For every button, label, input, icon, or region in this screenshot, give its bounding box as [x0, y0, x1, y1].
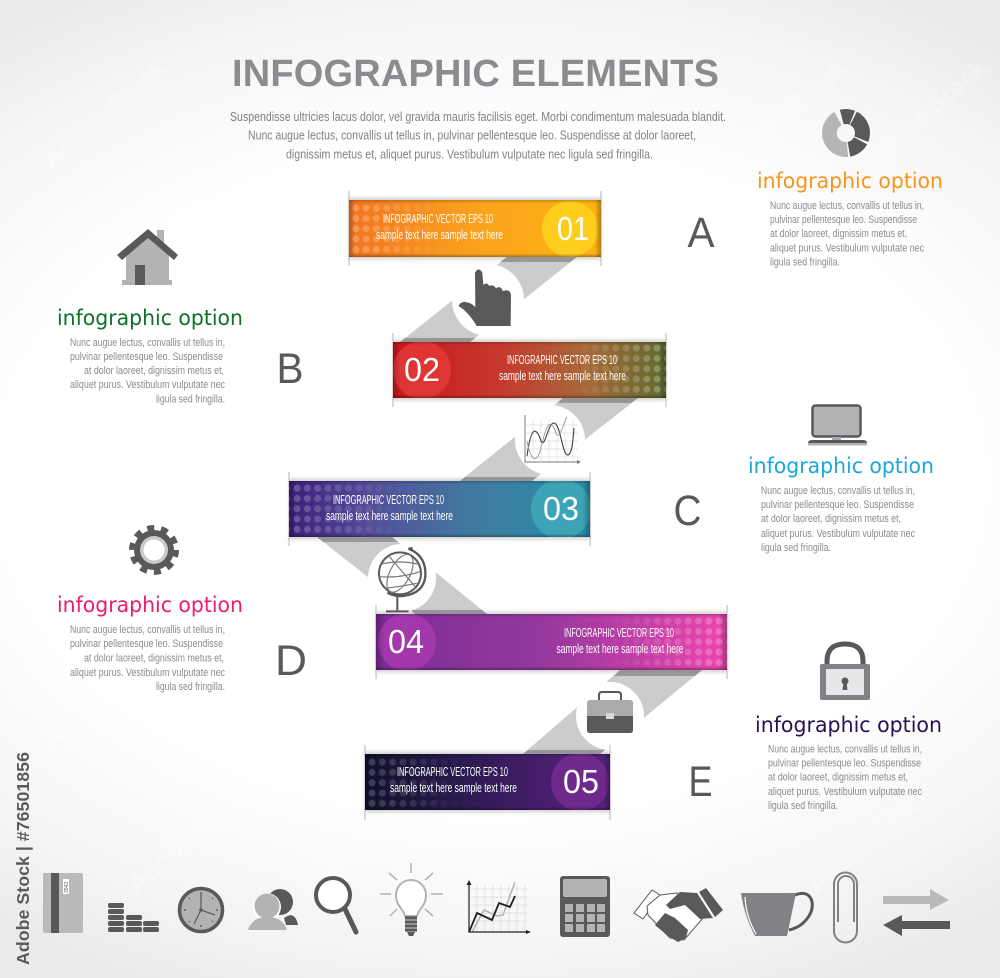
watermark pattern: Adobe Stock [122, 779, 257, 899]
banner 02: sample text here sample text here [499, 369, 626, 383]
panel: option C: infographic option [748, 454, 934, 478]
panel: option D: ligula sed fringilla. [156, 681, 225, 693]
connector: 02 to 03 [460, 398, 638, 481]
watermark pattern: Adobe Stock [377, 634, 512, 754]
banner 01: INFOGRAPHIC VECTOR EPS 10 [383, 212, 493, 226]
banner 05: 05 [563, 763, 599, 800]
watermark pattern: Adobe Stock [802, 199, 937, 319]
watermark pattern: Adobe Stock [717, 634, 852, 754]
letter A: A [688, 209, 715, 257]
panel: option E: ligula sed fringilla. [768, 800, 838, 812]
panel: option B: at dolor laoreet, dignissim metus et, [84, 365, 224, 377]
icon: stacked bars [108, 903, 159, 932]
icon: pointing hand [458, 269, 511, 326]
icon: paperclip [834, 872, 857, 942]
icon: line chart [525, 415, 581, 464]
panel: option D: at dolor laoreet, dignissim metus et, [84, 652, 224, 664]
banner 04: INFOGRAPHIC VECTOR EPS 10 [564, 626, 674, 640]
stock credit: Adobe Stock | #76501856 [13, 752, 33, 965]
panel: option E: infographic option [755, 713, 942, 737]
panel: option E [755, 644, 942, 812]
banner 01 [349, 191, 601, 266]
panel: option D: infographic option [57, 593, 243, 617]
letter D: D [275, 637, 307, 685]
banner 04 [376, 605, 727, 679]
icon: exchange arrows [883, 889, 950, 936]
watermark pattern: Adobe Stock [632, 489, 767, 609]
banner 03 [289, 472, 591, 546]
watermark pattern: Adobe Stock [802, 779, 937, 899]
watermark pattern: Adobe Stock [632, 779, 767, 899]
panel: option B: ligula sed fringilla. [156, 394, 225, 406]
watermark pattern: Adobe Stock [462, 199, 597, 319]
connector: 01 to 02 [400, 257, 577, 342]
intro text [230, 109, 726, 162]
banner 04: sample text here sample text here [556, 642, 684, 656]
icon: globe [379, 548, 425, 611]
watermark pattern: Adobe Stock [462, 779, 597, 899]
panel: option C: pulvinar pellentesque leo. Suspendisse [761, 499, 914, 511]
icon: people [248, 889, 298, 930]
intro text: Suspendisse ultricies lacus dolor, vel gravida mauris facilisis eget. Morbi condimentum malesuada blandit. [230, 109, 726, 124]
icon: coffee cup [741, 893, 812, 936]
icon: house [117, 229, 178, 285]
watermark pattern: Adobe Stock [632, 199, 767, 319]
title: INFOGRAPHIC ELEMENTS [232, 53, 719, 95]
watermark pattern: Adobe Stock [122, 489, 257, 609]
icon: credit card [43, 873, 83, 933]
banner 03: sample text here sample text here [326, 509, 453, 523]
banner 02 [393, 333, 666, 407]
panel: option A [757, 109, 943, 269]
panel: option E: aliquet purus. Vestibulum vulputate nec [768, 786, 922, 798]
watermark pattern: Adobe Stock [377, 54, 512, 174]
panel: option C: Nunc augue lectus, convallis ut tellus in, [761, 485, 915, 497]
icon: calculator [560, 876, 610, 937]
watermark pattern: Adobe Stock [37, 54, 172, 174]
panel: option D: aliquet purus. Vestibulum vulputate nec [70, 667, 225, 679]
icon: donut chart [822, 109, 870, 157]
icon: laptop [808, 406, 867, 446]
panel: option C [748, 406, 934, 554]
panel: option A: pulvinar pellentesque leo. Suspendisse [770, 214, 917, 226]
intro text: Nunc augue lectus, convallis ut tellus in, pulvinar pellentesque leo. Suspendisse at dolor laoreet, [248, 128, 696, 142]
watermark pattern: Adobe Stock [547, 344, 682, 464]
watermark pattern: Adobe Stock [292, 199, 427, 319]
panel: option B: aliquet purus. Vestibulum vulputate nec [70, 379, 225, 391]
panel: option A: infographic option [757, 169, 943, 193]
watermark pattern: Adobe Stock [547, 634, 682, 754]
panel: option A: ligula sed fringilla. [770, 256, 840, 268]
connector: 03 to 04 [317, 537, 487, 614]
panel: option E: Nunc augue lectus, convallis ut tellus in, [768, 744, 922, 756]
icon: credit card: 3543 [64, 882, 70, 893]
watermark pattern: Adobe Stock [37, 634, 172, 754]
watermark pattern: Adobe Stock [207, 634, 342, 754]
banner 05: INFOGRAPHIC VECTOR EPS 10 [397, 765, 508, 779]
panel: option B: infographic option [57, 306, 243, 330]
panel: option A: at dolor laoreet, dignissim metus et, [770, 228, 907, 240]
watermark pattern: Adobe Stock [207, 54, 342, 174]
letter C: C [674, 487, 702, 535]
panel: option D: pulvinar pellentesque leo. Suspendisse [70, 638, 223, 650]
panel: option B: Nunc augue lectus, convallis ut tellus in, [70, 337, 225, 349]
watermark pattern: Adobe Stock [857, 344, 992, 464]
watermark pattern: Adobe Stock [857, 54, 992, 174]
banner 02: 02 [404, 351, 440, 388]
watermark pattern: Adobe Stock [802, 489, 937, 609]
icon: light bulb [380, 863, 443, 936]
icon: briefcase [587, 692, 633, 733]
icon row [43, 863, 950, 942]
watermark pattern: Adobe Stock [717, 54, 852, 174]
banner 03: 03 [543, 490, 579, 527]
panel: option C: ligula sed fringilla. [761, 542, 831, 554]
icon: handshake [634, 888, 723, 942]
watermark pattern: Adobe Stock [207, 344, 342, 464]
panel: option D: Nunc augue lectus, convallis ut tellus in, [70, 624, 225, 636]
icon: magnifier [316, 878, 356, 932]
panel: option E: at dolor laoreet, dignissim metus et, [768, 772, 908, 784]
panel: option E: pulvinar pellentesque leo. Suspendisse [768, 758, 921, 770]
icon: clock [180, 888, 222, 932]
watermark pattern: Adobe Stock [377, 344, 512, 464]
panel: option D [57, 528, 243, 693]
intro text: dignissim metus et, aliquet purus. Vestibulum vulputate nec ligula sed fringilla. [286, 146, 653, 162]
letter B: B [276, 345, 304, 393]
watermark pattern: Adobe Stock [292, 779, 427, 899]
banner 05 [365, 745, 610, 820]
watermark pattern: Adobe Stock [462, 489, 597, 609]
panel: option B [57, 229, 243, 406]
watermark pattern: Adobe Stock [857, 634, 992, 754]
watermark pattern: Adobe Stock [122, 199, 257, 319]
watermark pattern: Adobe Stock [717, 344, 852, 464]
watermark pattern: Adobe Stock [547, 54, 682, 174]
panel: option B: pulvinar pellentesque leo. Suspendisse [70, 351, 223, 363]
banner 01: 01 [557, 210, 589, 247]
connector: 04 to 05 [523, 670, 702, 754]
banner 02: INFOGRAPHIC VECTOR EPS 10 [507, 353, 617, 367]
panel: option C: aliquet purus. Vestibulum vulputate nec [761, 528, 915, 540]
panel: option C: at dolor laoreet, dignissim metus et, [761, 513, 901, 525]
watermark pattern: Adobe Stock [292, 489, 427, 609]
icon: gear [132, 528, 176, 572]
banner 05: sample text here sample text here [390, 781, 517, 795]
icon: growth chart [466, 880, 531, 934]
watermark pattern: Adobe Stock [37, 344, 172, 464]
panel: option A: aliquet purus. Vestibulum vulputate nec [770, 242, 924, 254]
letter E: E [688, 758, 712, 806]
icon: padlock [820, 644, 870, 700]
panel: option A: Nunc augue lectus, convallis ut tellus in, [770, 200, 924, 212]
banner 01: sample text here sample text here [376, 228, 503, 242]
banner 04: 04 [388, 623, 424, 660]
banner 03: INFOGRAPHIC VECTOR EPS 10 [333, 493, 444, 507]
